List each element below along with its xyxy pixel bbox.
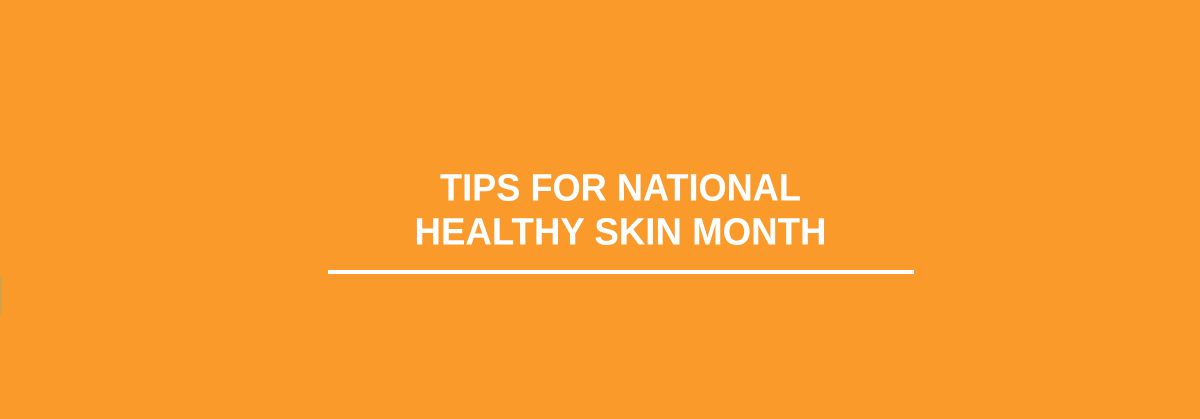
title: TIPS FOR NATIONAL	[440, 168, 801, 210]
title	[414, 168, 826, 253]
title: HEALTHY SKIN MONTH	[414, 211, 826, 253]
underline rule	[328, 270, 914, 274]
